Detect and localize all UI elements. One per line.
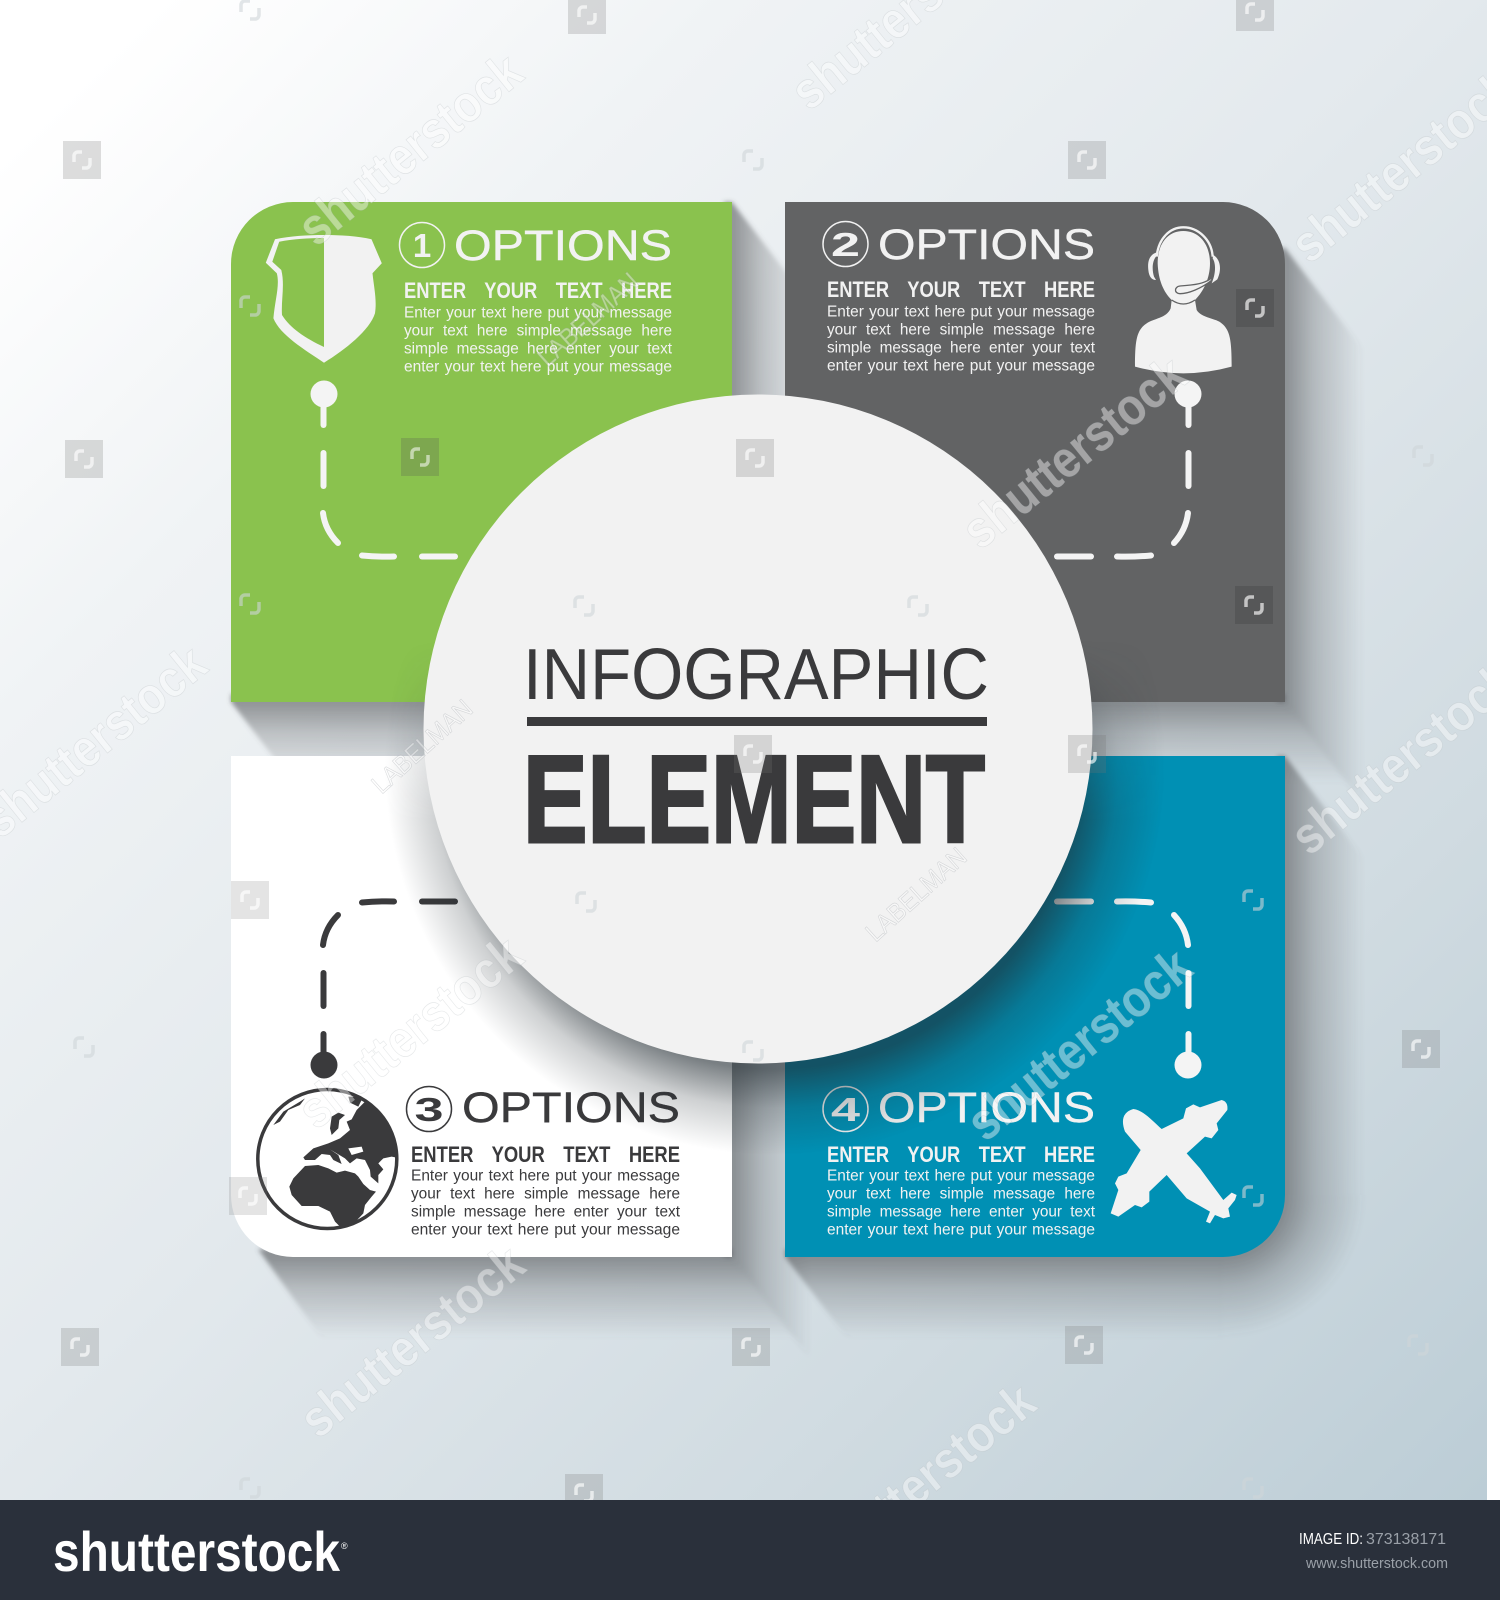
option 4 text block (827, 1142, 1096, 1238)
center circle shadow (395, 692, 1150, 1146)
watermark text: shutterstock (287, 925, 534, 1140)
footer bar (0, 1500, 1500, 1600)
option 4 text block: ENTER YOUR TEXT HERE (827, 1142, 1095, 1167)
option 4 heading: OPTIONS (878, 1084, 1095, 1132)
option 1 text block: enter your text here put your message (404, 358, 672, 376)
icon: support agent with headset (1135, 227, 1232, 373)
icon: shield (266, 235, 382, 363)
panel: option 3 (white) (231, 756, 732, 1257)
option 1 text block (404, 278, 673, 376)
option 4 heading: 4 (831, 1091, 861, 1128)
option 1 heading: OPTIONS (454, 222, 672, 270)
option 1 heading: 1 (413, 227, 431, 264)
title rule (527, 717, 987, 726)
title line: ELEMENT: ELEMENT (523, 731, 985, 869)
option 2 text block (827, 277, 1096, 374)
watermark text: shutterstock (956, 937, 1203, 1152)
option 2 heading: OPTIONS (878, 221, 1095, 269)
option 2 heading: 2 (831, 226, 860, 263)
long shadows of the cards (231, 202, 1385, 1387)
watermark text: shutterstock (800, 1372, 1047, 1587)
watermark text: shutterstock (951, 345, 1198, 560)
watermark text: shutterstock (287, 42, 534, 257)
option 2 text block: simple message here enter your text (827, 340, 1096, 356)
option 1 text block: ENTER YOUR TEXT HERE (404, 278, 672, 303)
icon: airplane (1111, 1100, 1237, 1223)
icon: globe (258, 1090, 400, 1228)
panel: option 4 (blue) (785, 756, 1285, 1257)
option 3 text block: ENTER YOUR TEXT HERE (411, 1142, 680, 1167)
dashed route (310, 380, 455, 557)
option 3 text block: simple message here enter your text (411, 1204, 681, 1220)
panel: option 2 (gray) (785, 202, 1285, 702)
option 3 text block: your text here simple message here (411, 1186, 680, 1202)
option 3 heading: OPTIONS (462, 1084, 680, 1132)
option 4 text block: your text here simple message here (827, 1186, 1095, 1202)
center circle with title (424, 394, 1092, 1064)
website: www.shutterstock.com (1305, 1556, 1448, 1572)
option 4 text block: simple message here enter your text (827, 1204, 1096, 1220)
option 4 text block: Enter your text here put your message (827, 1168, 1095, 1184)
watermark text: shutterstock (289, 1234, 536, 1449)
option 1 text block: your text here simple message here (404, 322, 672, 340)
option 2 text block: Enter your text here put your message (827, 304, 1095, 320)
option 1 text block: Enter your text here put your message (404, 304, 672, 322)
watermark text: LABELMAN (365, 693, 478, 799)
panel: option 1 (green) (231, 202, 732, 702)
image id number: 373138171 (1366, 1531, 1446, 1548)
shutterstock logo text: shutterstock (53, 1520, 341, 1583)
option 4 text block: enter your text here put your message (827, 1222, 1095, 1238)
watermark text: LABELMAN (531, 266, 644, 372)
option 2 text block: ENTER YOUR TEXT HERE (827, 277, 1095, 302)
option 3 text block: Enter your text here put your message (411, 1168, 680, 1184)
image id: IMAGE ID: (1299, 1531, 1363, 1548)
dashed route (310, 901, 455, 1078)
option 2 text block: your text here simple message here (827, 322, 1095, 338)
dashed route (1057, 380, 1202, 557)
registered mark: ® (341, 1541, 348, 1551)
option 3 text block (411, 1142, 681, 1238)
option 2 text block: enter your text here put your message (827, 358, 1095, 374)
dashed route (1057, 901, 1202, 1078)
right white margin (1487, 0, 1500, 1500)
watermark text: LABELMAN (859, 841, 972, 947)
option 1 text block: simple message here enter your text (404, 340, 673, 358)
title line: INFOGRAPHIC: INFOGRAPHIC (523, 634, 989, 715)
option 3 text block: enter your text here put your message (411, 1222, 680, 1238)
option 3 heading: 3 (414, 1091, 444, 1128)
